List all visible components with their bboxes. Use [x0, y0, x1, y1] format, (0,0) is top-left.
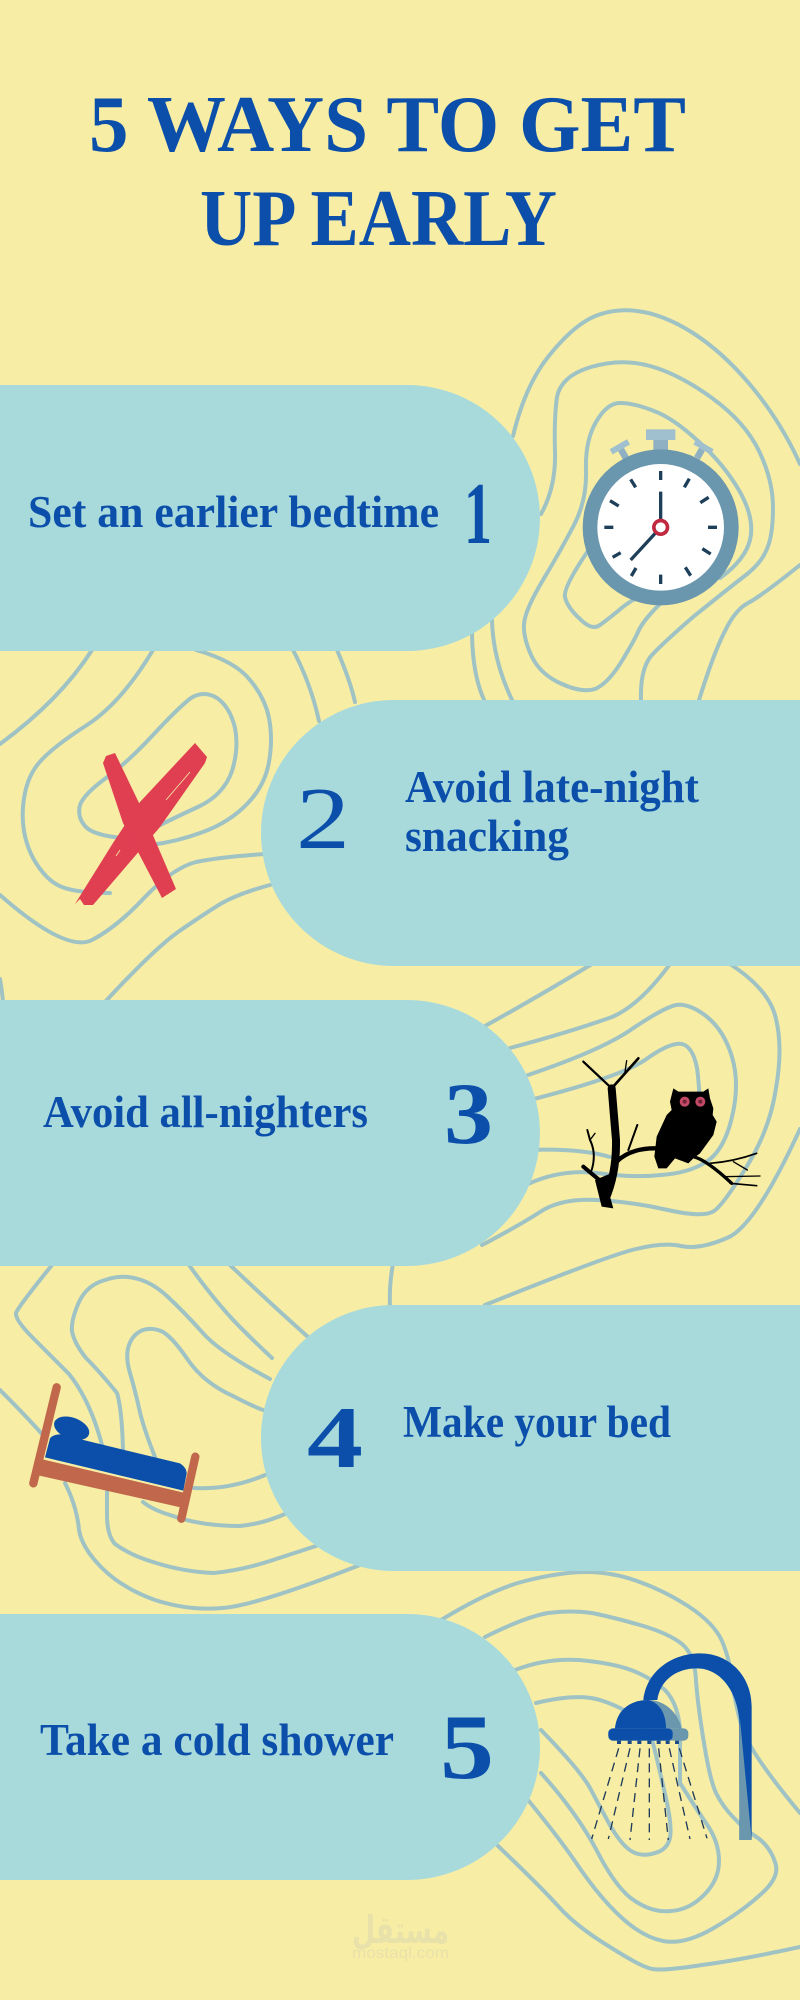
step 4 text: Make your bed	[403, 1397, 671, 1447]
panel: step 4	[261, 1305, 800, 1571]
icon: stopwatch	[583, 429, 739, 605]
step 1 text: Set an earlier bedtime	[28, 487, 439, 537]
step 2 text: snacking	[405, 811, 569, 861]
panel: step 5	[0, 1614, 540, 1880]
step 3 text: Avoid all-nighters	[43, 1087, 368, 1137]
panel: step 2	[261, 700, 800, 966]
step 2 number: 2	[296, 771, 350, 868]
icon: shower	[592, 1653, 752, 1840]
panel: step 1	[0, 385, 540, 651]
icon: owl on a branch	[583, 1058, 760, 1208]
icon: bed	[33, 1387, 195, 1519]
title: UP EARLY	[200, 175, 557, 263]
step 2 text: Avoid late-night	[405, 762, 699, 812]
title: 5 WAYS TO GET	[89, 81, 686, 169]
title	[89, 81, 686, 263]
step 1 number: 1	[464, 466, 492, 563]
step 5 text: Take a cold shower	[40, 1715, 394, 1765]
step 4 number: 4	[307, 1390, 363, 1487]
step 5 number: 5	[440, 1696, 494, 1798]
icon: red cross	[75, 743, 207, 905]
watermark: mostaql.com	[352, 1945, 449, 1962]
panel: step 3	[0, 1000, 540, 1266]
step 2 text	[405, 762, 699, 861]
step 3 number: 3	[444, 1066, 493, 1163]
watermark: مستقل	[352, 1908, 449, 1952]
watermark	[352, 1908, 449, 1962]
